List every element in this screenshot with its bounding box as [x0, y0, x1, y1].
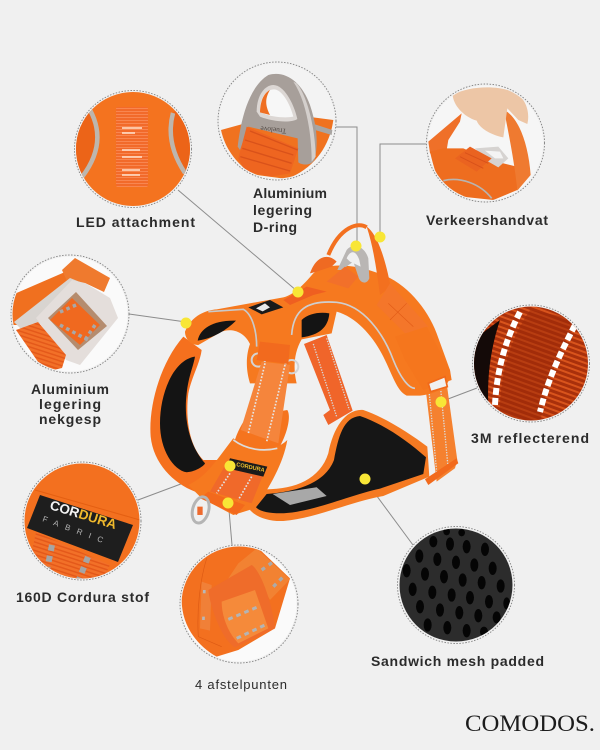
label: buckle: nekgesp	[39, 411, 101, 427]
label: D-ring: legering	[253, 202, 312, 218]
top pad	[310, 257, 337, 273]
callout: buckle	[10, 255, 132, 375]
dotted ring	[218, 62, 336, 180]
label: D-ring: D-ring	[253, 219, 297, 235]
label: buckle: legering	[39, 396, 101, 412]
dotted ring	[23, 462, 141, 580]
handle	[328, 225, 428, 340]
Cordura photo: FABRIC	[41, 514, 111, 547]
brand wordmark: COMODOS.	[465, 711, 595, 736]
D-ring	[337, 246, 369, 283]
main yoke and back arch	[185, 265, 450, 396]
chest plate	[250, 410, 429, 521]
yellow callout dots	[180, 232, 446, 508]
neck loop	[150, 337, 222, 492]
front chest piece: CORDURA	[236, 462, 265, 474]
Cordura photo: CORDURA	[48, 498, 119, 532]
front chest piece	[188, 438, 287, 515]
callout: 3M reflective	[472, 305, 590, 425]
dotted ring	[472, 305, 590, 422]
side buckle	[395, 327, 452, 392]
callout: Cordura	[22, 462, 144, 585]
mesh photo	[398, 527, 514, 643]
dotted ring	[426, 84, 544, 202]
label: mesh: Sandwich mesh padded	[371, 653, 544, 669]
callout: LED attachment	[74, 90, 192, 208]
label: 3M reflective: 3M reflecterend	[471, 430, 589, 446]
Cordura photo	[24, 464, 140, 578]
dotted ring	[11, 255, 129, 373]
small O-ring	[189, 495, 212, 525]
rear strap	[304, 335, 353, 425]
callout: adjustment points	[178, 544, 300, 666]
callout: mesh	[398, 526, 514, 644]
handle photo	[428, 87, 531, 200]
center strap with ring	[233, 342, 298, 452]
label: Cordura: 160D Cordura stof	[16, 589, 149, 605]
harness illustration	[150, 225, 458, 525]
buckle photo	[10, 255, 132, 375]
callout: handle	[425, 84, 547, 204]
label: handle: Verkeershandvat	[426, 212, 548, 228]
LED photo	[76, 92, 190, 206]
dotted ring	[74, 90, 192, 208]
label: adjustment points: 4 afstelpunten	[195, 677, 287, 692]
label: D-ring: Aluminium	[253, 185, 327, 201]
right strap	[425, 378, 458, 485]
D-ring photo: Truelove	[260, 124, 287, 136]
label: LED attachment: LED attachment	[76, 214, 195, 230]
adjustment photo	[182, 546, 296, 662]
reflective photo	[472, 305, 590, 425]
label: buckle: Aluminium	[31, 381, 109, 397]
connector lines	[129, 127, 477, 545]
callout: D-ring	[215, 60, 340, 185]
dotted ring	[180, 545, 298, 663]
dotted ring	[398, 526, 514, 644]
D-ring strap	[327, 267, 358, 288]
